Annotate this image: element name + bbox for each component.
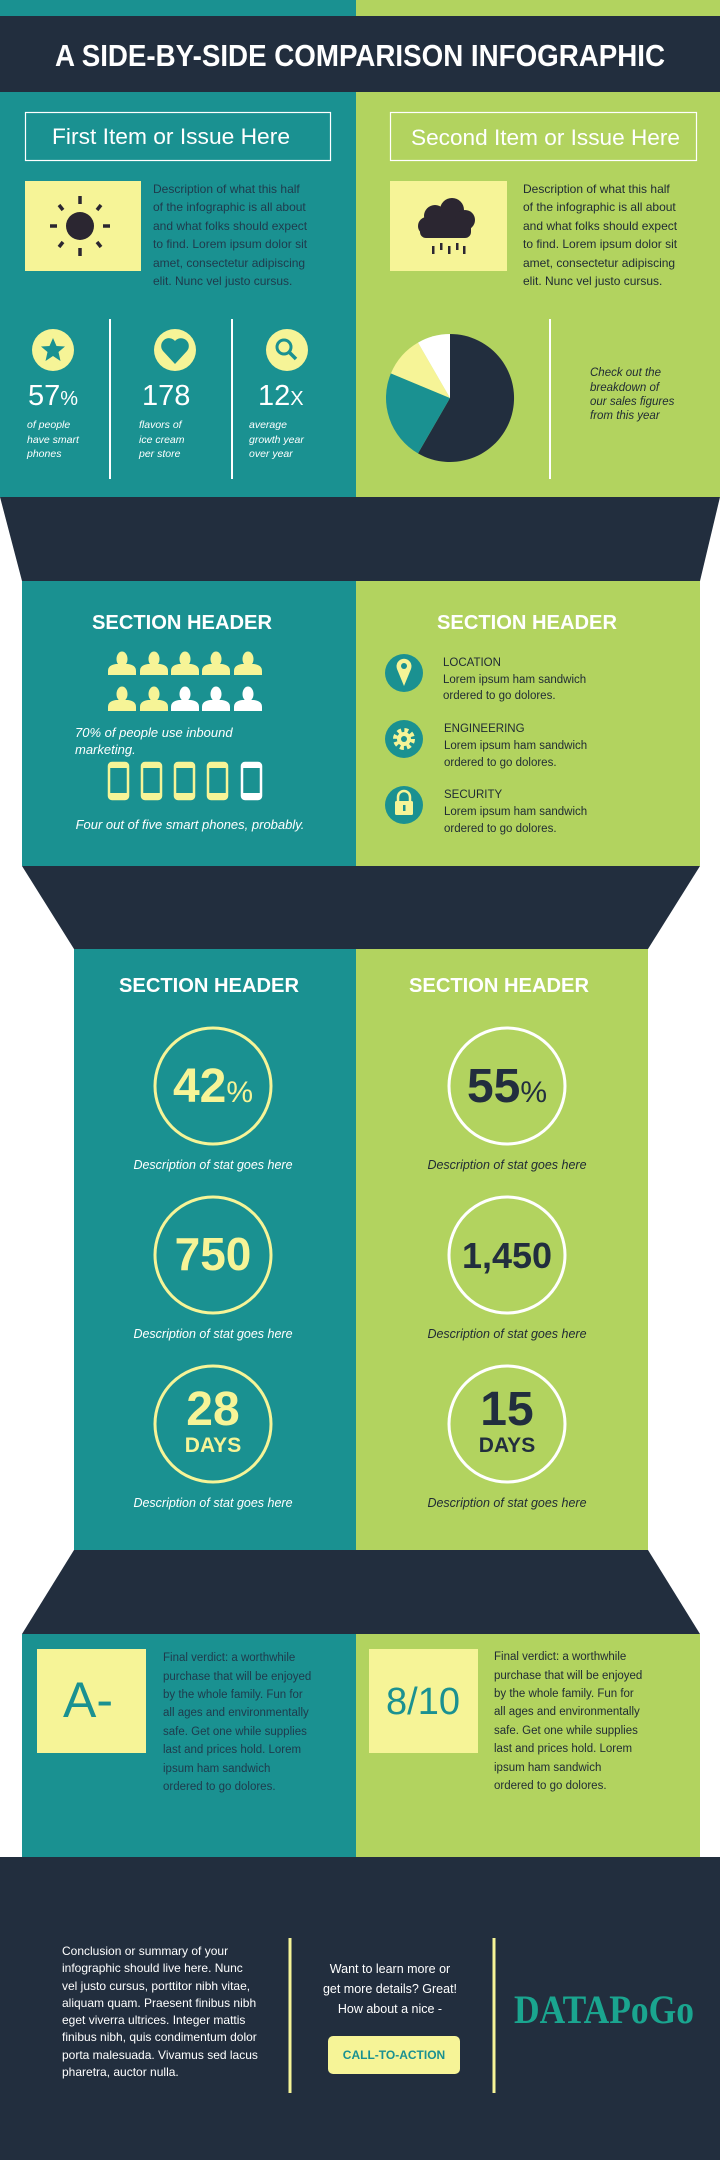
item: security: ordered to go dolores. (444, 823, 557, 835)
description right: of the infographic is all about (523, 200, 676, 214)
conclusion text: Conclusion or summary of your (62, 1944, 228, 1958)
description right (523, 182, 678, 288)
stat circle 15 days: 15 (480, 1383, 534, 1436)
description right: amet, consectetur adipiscing (523, 256, 675, 270)
pie caption: Check out the (590, 367, 661, 379)
verdict text right: by the whole family. Fun for (494, 1688, 634, 1700)
section 2 header left: SECTION HEADER (92, 612, 273, 634)
verdict text right: all ages and environmentally (494, 1706, 640, 1718)
conclusion text: eget viverra ultrices. Integer mattis (62, 2013, 245, 2027)
stat: 57%: have smart (27, 434, 80, 446)
icon: sun (25, 181, 141, 271)
stat circle 28 days: Description of stat goes here (133, 1496, 293, 1510)
description right: elit. Nunc vel justo cursus. (523, 274, 662, 288)
verdict text left: ipsum ham sandwich (163, 1763, 270, 1775)
dark band 1 (0, 497, 720, 581)
stat: 12x: average (249, 419, 287, 431)
stat circle 1,450 (427, 1197, 587, 1341)
item: location (385, 654, 586, 702)
description left: and what folks should expect (153, 219, 308, 233)
verdict text left: last and prices hold. Lorem (163, 1744, 301, 1756)
description left: elit. Nunc vel justo cursus. (153, 274, 292, 288)
section 2 header right: SECTION HEADER (437, 612, 618, 634)
conclusion text: pharetra, auctor nulla. (62, 2065, 179, 2079)
verdict text left: by the whole family. Fun for (163, 1689, 303, 1701)
stat circle 42%: Description of stat goes here (133, 1158, 293, 1172)
verdict text right: safe. Get one while supplies (494, 1725, 638, 1737)
call to action button: CALL-TO-ACTION (343, 2048, 445, 2062)
verdict text right (494, 1651, 642, 1792)
item: location: LOCATION (443, 657, 501, 669)
dark band 2 (22, 866, 700, 949)
item: engineering: ENGINEERING (444, 723, 525, 735)
verdict text left: ordered to go dolores. (163, 1781, 276, 1793)
grade box 8/10 (369, 1649, 478, 1753)
pie chart (386, 334, 514, 462)
people caption: marketing. (75, 742, 136, 757)
stat: 178: ice cream (139, 434, 185, 446)
item: engineering: Lorem ipsum ham sandwich (444, 740, 587, 752)
stat circle 15 days: DAYS (479, 1434, 535, 1457)
icon: rain cloud (390, 181, 507, 271)
logo: DATAPoGo (514, 1987, 694, 2032)
section 3 header right: SECTION HEADER (409, 975, 590, 997)
description right: and what folks should expect (523, 219, 678, 233)
stat: 57%: of people (27, 419, 70, 431)
conclusion text: vel justo cursus, porttitor nibh vitae, (62, 1979, 250, 1993)
stat: 178: flavors of (139, 419, 183, 431)
description left: of the infographic is all about (153, 200, 306, 214)
item: location: Lorem ipsum ham sandwich (443, 674, 586, 686)
stat: 57% (26, 329, 80, 460)
stat circle 15 days (427, 1366, 587, 1510)
section 4 background (22, 1634, 700, 1857)
pie caption: breakdown of (590, 382, 661, 394)
stat circle 42%: 42% (173, 1060, 253, 1113)
title box: first item: First Item or Issue Here (52, 124, 290, 149)
description left: Description of what this half (153, 182, 300, 196)
section 3 background (74, 949, 648, 1550)
verdict text right: ipsum ham sandwich (494, 1762, 601, 1774)
grade box A-: A- (63, 1672, 113, 1728)
description right: Description of what this half (523, 182, 670, 196)
title box: second item (390, 112, 696, 160)
description left: amet, consectetur adipiscing (153, 256, 305, 270)
item: location: ordered to go dolores. (443, 690, 556, 702)
title box: second item: Second Item or Issue Here (411, 125, 680, 150)
conclusion text: infographic should live here. Nunc (62, 1961, 243, 1975)
stat circle 28 days: 28 (186, 1383, 240, 1436)
pie caption: our sales figures (590, 396, 675, 408)
phone icons (109, 763, 261, 799)
footer (0, 1857, 720, 2160)
verdict text right: Final verdict: a worthwhile (494, 1651, 626, 1663)
call to action button (328, 2036, 460, 2074)
verdict text left: Final verdict: a worthwhile (163, 1652, 295, 1664)
conclusion text: finibus nibh, quis condimentum dolor (62, 2030, 257, 2044)
stat: 12x: growth year (249, 434, 304, 446)
item: engineering (385, 720, 587, 769)
stat circle 1,450: Description of stat goes here (427, 1327, 587, 1341)
item: security: SECURITY (444, 789, 502, 801)
verdict text left (163, 1652, 311, 1793)
conclusion text: porta malesuada. Vivamus sed lacus (62, 2048, 258, 2062)
stat: 12x (249, 329, 308, 460)
item: security: Lorem ipsum ham sandwich (444, 806, 587, 818)
call to action text: get more details? Great! (323, 1982, 457, 1996)
title bar (0, 16, 720, 92)
description right: to find. Lorem ipsum dolor sit (523, 237, 678, 251)
item: security (385, 786, 587, 835)
stat circle 42% (133, 1028, 293, 1172)
grade box A- (37, 1649, 146, 1753)
section 2 background (22, 581, 700, 866)
call to action text: How about a nice - (338, 2002, 442, 2016)
description left: to find. Lorem ipsum dolor sit (153, 237, 308, 251)
dark band 3 (22, 1550, 700, 1634)
stat circle 55% (427, 1028, 587, 1172)
verdict text left: all ages and environmentally (163, 1707, 309, 1719)
title box: first item (26, 112, 330, 160)
verdict text right: last and prices hold. Lorem (494, 1743, 632, 1755)
verdict text right: ordered to go dolores. (494, 1780, 607, 1792)
people icons (108, 652, 262, 711)
stat: 178: 178 (142, 380, 190, 412)
stat: 178 (138, 329, 196, 460)
verdict text left: purchase that will be enjoyed (163, 1671, 311, 1683)
verdict text right: purchase that will be enjoyed (494, 1670, 642, 1682)
stat circle 750: 750 (175, 1228, 251, 1280)
top background halves (0, 0, 720, 497)
grade box 8/10: 8/10 (386, 1681, 460, 1723)
verdict text left: safe. Get one while supplies (163, 1726, 307, 1738)
stat: 57%: 57% (28, 380, 78, 412)
stat: 178: per store (138, 448, 181, 460)
stat: 12x: 12X (258, 380, 304, 412)
phones caption: Four out of five smart phones, probably. (76, 817, 304, 832)
section 3 header left: SECTION HEADER (119, 975, 300, 997)
item: engineering: ordered to go dolores. (444, 757, 557, 769)
pie caption (590, 367, 675, 422)
stat circle 55%: Description of stat goes here (427, 1158, 587, 1172)
stat circle 28 days: DAYS (185, 1434, 241, 1457)
conclusion text (62, 1944, 258, 2079)
stat circle 55%: 55% (467, 1060, 547, 1113)
call to action text (323, 1962, 457, 2016)
description left (153, 182, 308, 288)
conclusion text: aliquam quam. Praesent finibus nibh (62, 1996, 256, 2010)
call to action text: Want to learn more or (330, 1962, 450, 1976)
people caption (75, 725, 233, 757)
stat circle 750 (133, 1197, 293, 1341)
stat circle 28 days (133, 1366, 293, 1510)
title bar: A SIDE-BY-SIDE COMPARISON INFOGRAPHIC (55, 38, 665, 73)
stat circle 750: Description of stat goes here (133, 1327, 293, 1341)
stat circle 1,450: 1,450 (462, 1235, 552, 1276)
stat circle 15 days: Description of stat goes here (427, 1496, 587, 1510)
people caption: 70% of people use inbound (75, 725, 233, 740)
stat: 57%: phones (26, 448, 62, 460)
pie caption: from this year (590, 410, 661, 422)
stat: 12x: over year (249, 448, 293, 460)
